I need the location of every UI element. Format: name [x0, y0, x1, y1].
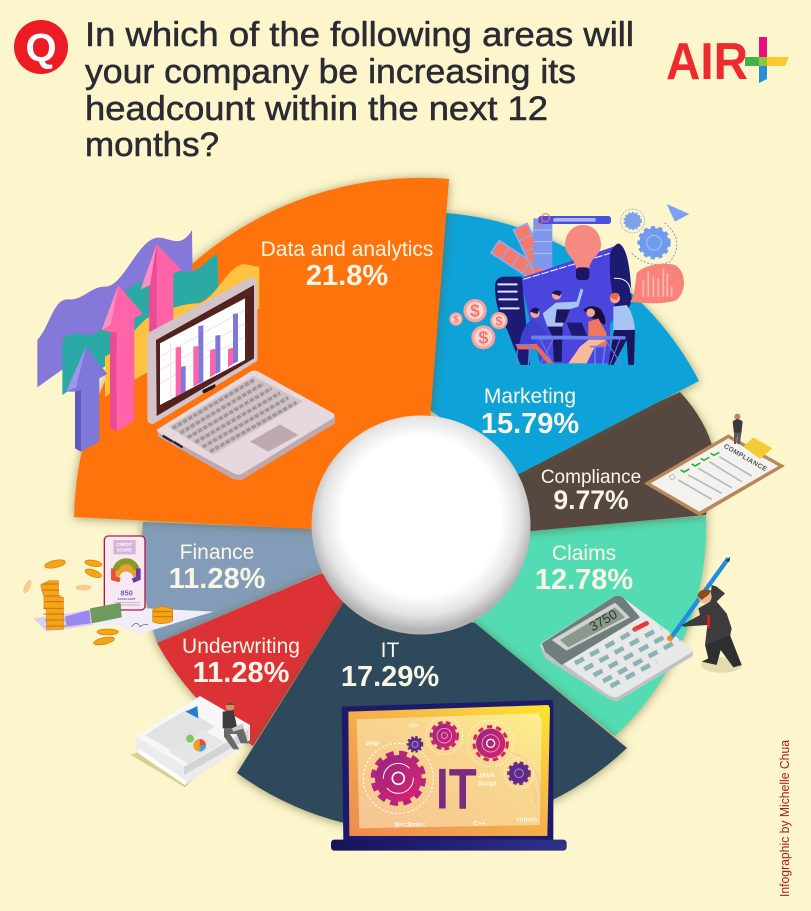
- logo: AIR+: AIR: [666, 33, 748, 91]
- chart: exploded pie: [74, 178, 714, 832]
- slice: compliance: [510, 392, 714, 532]
- label: underwriting: 11.28%: [193, 657, 290, 689]
- screen: [348, 705, 550, 836]
- calculator body: 3750: [587, 606, 620, 634]
- compliance word: COMPLIANCE: [722, 443, 768, 474]
- label: data and analytics: 21.8%: [306, 260, 388, 292]
- laptop base: [157, 371, 335, 480]
- code labels: C++: [473, 820, 486, 827]
- slice: claims: [470, 516, 706, 736]
- seated man: [223, 702, 248, 749]
- faded coins: [22, 579, 91, 595]
- code labels: [366, 722, 538, 829]
- search bar: [538, 214, 611, 227]
- label: compliance: Compliance: [541, 467, 641, 488]
- credit: Infographic by Michelle Chua: [777, 739, 792, 897]
- illustration: marketing team and megaphone: [449, 204, 689, 365]
- code labels: PHP: [366, 741, 380, 748]
- label: compliance: 9.77%: [553, 485, 629, 515]
- phone: [104, 536, 145, 610]
- code labels: <html>: [516, 816, 538, 823]
- code labels: Script: [478, 781, 497, 788]
- pink front arrow: [102, 285, 143, 432]
- title: your company be increasing its: [85, 53, 576, 91]
- pyramid chart: [186, 706, 198, 718]
- phone: CREDIT: [116, 542, 133, 547]
- megaphone: [495, 243, 632, 365]
- tiny businessman: [733, 414, 743, 444]
- slice: IT: [237, 600, 627, 832]
- paper and cheque: [33, 608, 213, 634]
- illustration: claims calculator: [540, 557, 742, 702]
- illustration: underwriting report stack: [131, 696, 250, 787]
- coins: [41, 558, 173, 646]
- label: marketing: 15.79%: [481, 408, 579, 440]
- laptop screen: [147, 277, 257, 424]
- illustration: finance phone and coins: [22, 536, 213, 646]
- phone: SCORE: [117, 547, 132, 552]
- title: headcount within the next 12: [85, 90, 548, 128]
- small gears: [408, 717, 541, 805]
- slice: finance: [142, 522, 325, 643]
- calculator body: [540, 596, 693, 702]
- label: underwriting: Underwriting: [182, 635, 300, 658]
- banknotes: [90, 603, 122, 623]
- label: finance: Finance: [180, 541, 254, 564]
- pie thumbnail: [186, 735, 206, 752]
- light bulb: [565, 225, 601, 280]
- label: marketing: Marketing: [484, 385, 576, 408]
- illustration: data and analytics laptop: [37, 230, 335, 480]
- dollar coins: $: [495, 314, 503, 328]
- woman with laptop: [567, 306, 607, 365]
- IT wordmark: IT: [436, 757, 477, 821]
- icon: Q badge: Q: [25, 26, 57, 70]
- purple wave: [37, 230, 193, 387]
- standing man right: [608, 293, 635, 365]
- dollar coins: [449, 299, 508, 349]
- yellow wave: [105, 264, 259, 397]
- label: claims: Claims: [552, 542, 616, 565]
- dollar coins: $: [470, 301, 480, 321]
- label: IT: IT: [381, 639, 399, 662]
- dollar coins: $: [453, 315, 459, 326]
- team around table: [515, 288, 635, 365]
- illustration: compliance clipboard: [644, 414, 785, 516]
- slice: underwriting: [157, 573, 345, 746]
- teal wave: [62, 254, 219, 395]
- standing man pointing: [543, 288, 583, 362]
- slice: marketing: [430, 213, 699, 474]
- laptop base: [331, 840, 567, 851]
- pink rear arrow: [141, 244, 182, 340]
- code labels: JAVA: [478, 772, 495, 779]
- gears and paper plane: [621, 204, 689, 264]
- businessman with pencil: [667, 557, 742, 667]
- title: In which of the following areas will: [85, 16, 634, 54]
- illustration: IT laptop: [331, 700, 567, 851]
- checklist lines: [678, 457, 752, 499]
- seated man: [515, 308, 554, 365]
- icon: Q badge: [14, 20, 68, 74]
- label: IT: 17.29%: [341, 661, 439, 693]
- large gear: [363, 743, 433, 813]
- code labels: </>: [408, 722, 418, 729]
- title: months?: [85, 126, 219, 164]
- label: finance: 11.28%: [169, 563, 266, 595]
- slice: data and analytics: [74, 178, 449, 529]
- label: data and analytics: Data and analytics: [261, 238, 433, 261]
- paint swatches: [490, 218, 552, 281]
- check marks: [681, 452, 719, 472]
- code labels: $i<=$min;: [394, 822, 425, 829]
- laptop frame: [342, 700, 553, 840]
- clip: [743, 437, 772, 459]
- dollar coins: $: [478, 328, 488, 348]
- centre circle: [312, 416, 530, 634]
- phone: 850: [121, 589, 133, 598]
- label: claims: 12.78%: [535, 564, 633, 596]
- phone: EXCELLENT: [118, 597, 136, 601]
- table: [532, 336, 625, 365]
- figure shadow: [701, 657, 742, 673]
- speech bubble chart: [630, 264, 684, 303]
- purple arrow: [66, 347, 107, 452]
